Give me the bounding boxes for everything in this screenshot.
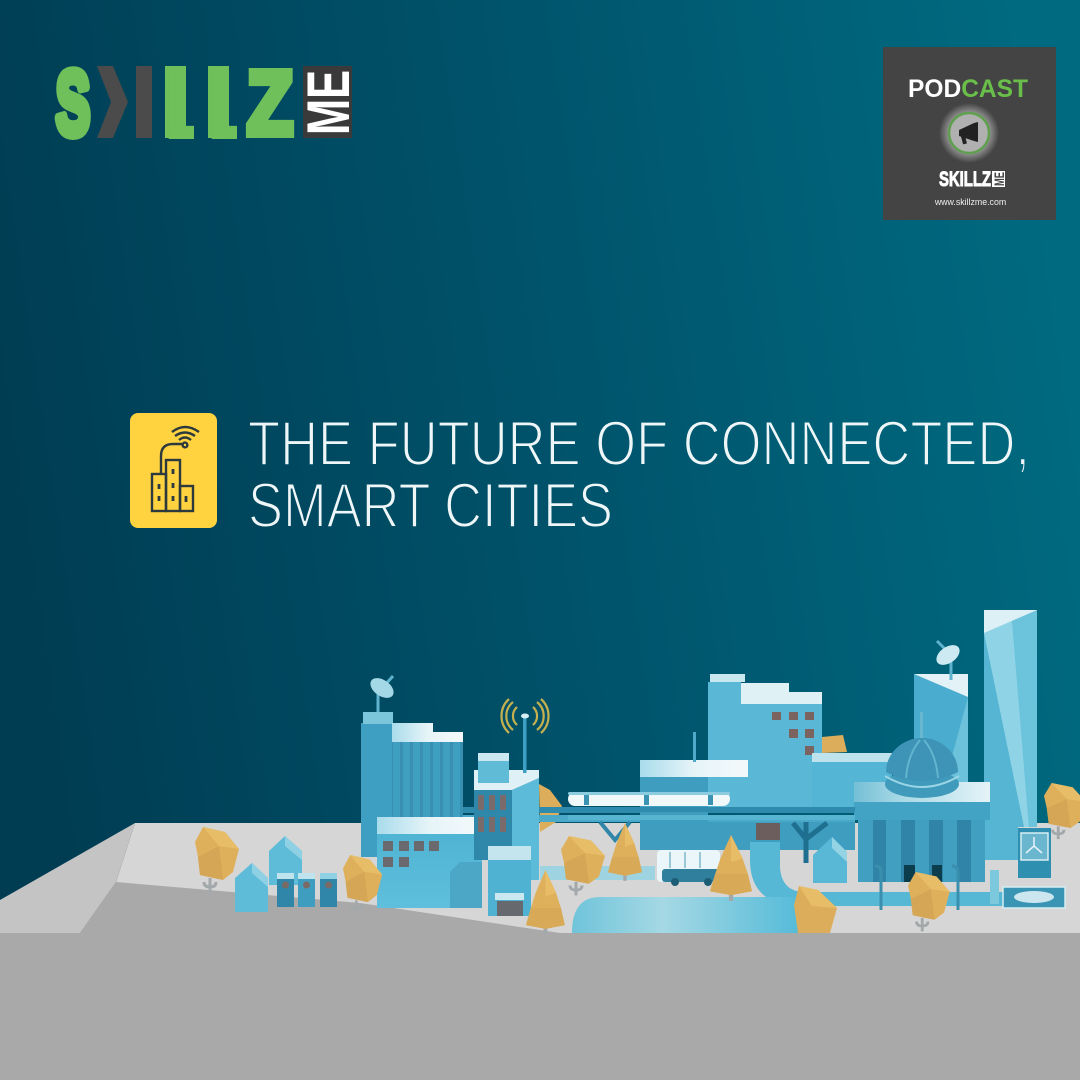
small houses left xyxy=(235,836,302,912)
logo letters L L: L xyxy=(166,48,195,160)
tree behind tower xyxy=(539,784,562,832)
city illustration xyxy=(195,610,1080,935)
kiosk and lamps xyxy=(875,866,999,910)
elevated rail xyxy=(463,807,855,840)
columned hall xyxy=(854,782,990,882)
main building xyxy=(708,674,822,807)
connector building xyxy=(812,753,892,807)
billboard wind turbine xyxy=(1018,828,1051,878)
pond xyxy=(572,897,800,933)
title: SMART CITIES xyxy=(248,471,613,541)
skyscraper xyxy=(984,610,1037,860)
icon: megaphone xyxy=(939,103,999,163)
small house centre xyxy=(813,837,847,883)
podcast mini logo: SKILLZ xyxy=(939,168,991,191)
low building with pole xyxy=(640,732,748,850)
logo letter Z: Z xyxy=(247,54,293,154)
monorail train xyxy=(568,792,730,806)
logo K chevron and bar xyxy=(97,66,152,138)
trees xyxy=(195,783,1080,935)
dome xyxy=(885,712,959,798)
icon: satellite dish left xyxy=(367,674,397,712)
building far left tall xyxy=(361,712,463,857)
logo letter S: S xyxy=(56,54,90,154)
walkway xyxy=(540,842,1003,906)
podcast heading: PODCAST xyxy=(908,75,1028,103)
billboard car xyxy=(1003,887,1065,908)
icon: smart city xyxy=(130,413,217,528)
podcast badge xyxy=(883,47,1056,220)
front block xyxy=(488,846,531,916)
ground plane xyxy=(0,823,1080,1080)
building with dish xyxy=(914,674,968,784)
podcast mini logo: ME xyxy=(991,172,1007,186)
bus xyxy=(657,850,720,886)
building low front xyxy=(377,817,482,908)
logo: SkillzME: L xyxy=(209,48,238,160)
icon: satellite dish right xyxy=(933,641,963,680)
title xyxy=(248,409,1030,541)
recycling bins xyxy=(277,873,337,907)
base of main building and rail front xyxy=(568,807,855,863)
logo: SkillzME xyxy=(56,48,362,160)
podcast url: www.skillzme.com xyxy=(934,197,1006,207)
icon: signal antenna xyxy=(501,699,549,773)
tower with antenna xyxy=(474,753,539,880)
tree behind main building xyxy=(822,735,847,753)
logo ME badge: ME xyxy=(295,70,362,135)
